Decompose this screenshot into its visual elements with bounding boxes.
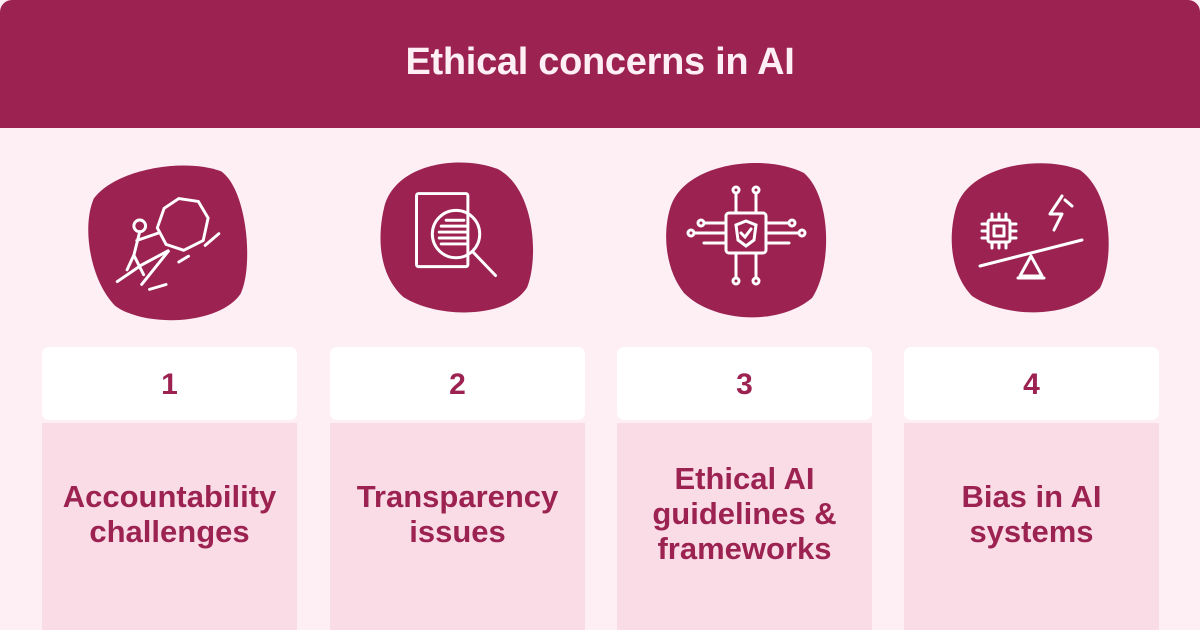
icon: seesaw (952, 163, 1109, 312)
icon: ai chip shield (666, 163, 826, 318)
card 3: 3 (736, 368, 753, 401)
title (0, 0, 1200, 128)
card 1 (42, 347, 297, 630)
card 2: issues (409, 514, 506, 549)
card 4: Bias in AI (961, 479, 1102, 514)
card 3: guidelines & (652, 496, 837, 531)
card 3 (617, 347, 872, 630)
icon: climber (88, 166, 248, 320)
icon: document magnifier (380, 162, 534, 312)
title: Ethical concerns in AI (406, 41, 794, 83)
card 1: challenges (89, 514, 250, 549)
card 4: 4 (1023, 368, 1040, 401)
card 2 (330, 347, 585, 630)
card 1: 1 (161, 368, 178, 401)
card 1: Accountability (63, 479, 276, 514)
card 3: Ethical AI (674, 461, 815, 496)
card 4 (904, 347, 1159, 630)
card 3: frameworks (657, 531, 832, 566)
card 2: Transparency (357, 479, 558, 514)
card 4: systems (969, 514, 1094, 549)
card 2: 2 (449, 368, 466, 401)
